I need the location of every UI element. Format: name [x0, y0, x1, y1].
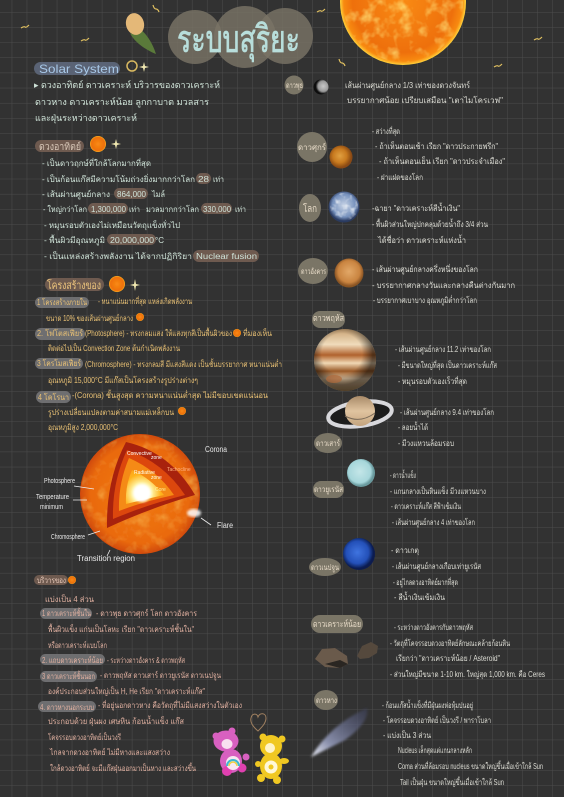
structure text: - หนาแน่นมากที่สุด แหล่งเกิดพลังงาน: [98, 295, 192, 306]
label: saturn: ดาวเสาร์: [316, 438, 341, 448]
sun fact lines: [42, 157, 257, 261]
icon: tulip: [123, 11, 156, 54]
panel: satellites: [34, 575, 242, 773]
sun fact lines: 1,300,000: [91, 205, 127, 214]
mercury text: บรรยากาศน้อย เปรียบเสมือน "เตาไมโครเวฟ": [347, 95, 503, 105]
planet: mercury: [314, 80, 328, 94]
icon: asteroid rocks: [315, 642, 378, 668]
neptune text: - อยู่ไกลดวงอาทิตย์มากที่สุด: [393, 576, 458, 588]
structure text: -(Corona) ชั้นสูงสุด ความหนาแน่นต่ำสุด ไม่มีขอบเขตแน่นอน: [72, 389, 268, 401]
earth text: ได้ชื่อว่า ดาวเคราะห์แห่งน้ำ: [377, 234, 466, 245]
confetti squiggles: [21, 5, 542, 67]
venus text: - ฝาแฝดของโลก: [377, 172, 423, 182]
satellites text: [40, 594, 242, 773]
diagram: sun cross-section: [80, 434, 201, 554]
asteroid text: - ระหว่างดาวอังคารกับดาวพฤหัส: [394, 623, 473, 632]
asteroid text: - วัตถุที่โคจรรอบดวงอาทิตย์ลักษณะคล้ายก้อนหิน: [390, 637, 510, 648]
mars text: - เส้นผ่านศูนย์กลางครึ่งหนึ่งของโลก: [372, 263, 478, 275]
label: neptune: [309, 558, 341, 576]
diagram inner labels: Core: [155, 487, 166, 493]
panel: saturn: [314, 396, 494, 453]
heading: Solar System: Solar System: [39, 62, 119, 76]
label: earth: [299, 194, 321, 222]
diagram inner labels: zone: [151, 455, 162, 461]
diagram callouts: Temperature: [36, 494, 69, 501]
diagram callouts: Photosphere: [44, 478, 75, 485]
intro text: และฝุ่นระหว่างดาวเคราะห์: [35, 112, 137, 124]
panel: asteroids: [311, 615, 545, 679]
sun fact lines: มวลมากกว่าโลก: [146, 204, 199, 214]
structure text: [37, 295, 282, 433]
earth text: [372, 202, 488, 245]
heading: satellites: บริวารของ: [37, 576, 66, 585]
comet text: [382, 699, 543, 787]
diagram callouts: [36, 445, 233, 563]
diagram callouts: minimum: [40, 504, 63, 511]
panel: sun facts: [35, 136, 259, 262]
structure text: 2. โฟโตสเฟียร์: [37, 328, 84, 338]
jupiter text: - มีขนาดใหญ่ที่สุด เป็นดาวเคราะห์แก๊ส: [398, 359, 497, 370]
icon: large sun: [340, 0, 466, 65]
structure text: อุณหภูมิสูง 2,000,000°C: [48, 423, 118, 433]
comet text: Tail เป็นฝุ่น ขนาดใหญ่ขึ้นเมื่อเข้าใกล้ Sun: [400, 776, 504, 787]
diagram inner labels: zone: [151, 475, 162, 481]
icon: heart: [251, 714, 266, 731]
panel: sun structure: [35, 276, 282, 433]
comet text: - ก้อนแก๊สน้ำแข็งที่มีฝุ่นผงห่อหุ้มปนอยู่: [382, 699, 473, 711]
planet: jupiter: [314, 329, 376, 391]
sun value pills: [88, 173, 259, 262]
label: asteroids: ดาวเคราะห์น้อย: [313, 618, 361, 629]
label: asteroids: [311, 615, 363, 633]
panel: mercury: [284, 76, 503, 105]
satellites text: 1 ดาวเคราะห์ชั้นใน: [42, 607, 91, 618]
satellites text: โคจรรอบดวงอาทิตย์เป็นวงรี: [48, 732, 122, 742]
diagram callouts: Flare: [217, 521, 233, 530]
satellites text: ไกลจากดวงอาทิตย์ ไม่มีหางและแสงสว่าง: [49, 747, 170, 757]
planet: neptune: [343, 538, 375, 570]
intro text: [34, 79, 220, 124]
icon: pink bear: [212, 728, 250, 776]
satellites text: 3 ดาวเคราะห์ชั้นนอก: [42, 670, 95, 681]
structure text: 3 โครโมสเฟียร์: [37, 358, 82, 368]
label: uranus: [313, 481, 344, 498]
mercury text: [345, 80, 503, 105]
label: mercury: [284, 76, 304, 94]
satellites text: พื้นผิวแข็ง แก่นเป็นโลหะ เรียก "ดาวเคราะห์ชั้นใน": [48, 623, 194, 634]
panel: jupiter: [312, 311, 497, 391]
neptune text: [391, 546, 481, 602]
sun fact lines: ไมล์: [151, 189, 165, 199]
label: mars: ดาวอังคาร: [301, 267, 326, 276]
label: jupiter: [312, 311, 345, 328]
satellites text: - ระหว่างดาวอังคาร & ดาวพฤหัส: [107, 656, 185, 665]
satellites text: หรือดาวเคราะห์แบบโลก: [48, 640, 107, 650]
uranus text: - ดาวเคราะห์แก๊ส สีฟ้าเข้มเงิน: [391, 501, 461, 511]
planet: earth: [328, 192, 360, 222]
saturn text: - เส้นผ่านศูนย์กลาง 9.4 เท่าของโลก: [400, 407, 494, 418]
satellites pills: [38, 608, 105, 712]
sun fact lines: - เป็นดาวฤกษ์ที่ใกล้โลกมากที่สุด: [42, 157, 151, 168]
sun fact lines: - ใหญ่กว่าโลก: [43, 204, 87, 214]
structure text: รูปร่างเปลี่ยนแปลงตามค่าสนามแม่เหล็กบน: [48, 406, 174, 418]
planet: mars: [334, 258, 364, 288]
earth text: - พื้นผิวส่วนใหญ่ปกคลุมด้วยน้ำถึง 3/4 ส่วน: [372, 218, 488, 229]
label: venus: [297, 132, 327, 162]
sun fact lines: เท่า: [213, 175, 224, 184]
uranus text: - เส้นผ่านศูนย์กลาง 4 เท่าของโลก: [392, 517, 475, 528]
mercury text: เส้นผ่านศูนย์กลาง 1/3 เท่าของดวงจันทร์: [345, 80, 471, 91]
structure pills: [35, 297, 89, 403]
label: earth: โลก: [303, 202, 317, 215]
planet: saturn: [327, 396, 393, 430]
comet text: - โคจรรอบดวงอาทิตย์ เป็นวงรี / พาราโบลา: [383, 715, 491, 725]
title: ระบบสุริยะ: [177, 19, 300, 62]
label: mercury: ดาวพุธ: [286, 81, 303, 90]
sun fact lines: 20,000,000: [110, 236, 155, 245]
panel: earth: [299, 192, 488, 245]
earth text: -ฉายา "ดาวเคราะห์สีน้ำเงิน": [372, 202, 460, 213]
saturn text: [398, 407, 494, 448]
label: uranus: ดาวยูเรนัส: [314, 485, 343, 495]
label: mars: [298, 258, 328, 284]
asteroid text: เรียกว่า "ดาวเคราะห์น้อย / Asteroid": [396, 653, 500, 663]
structure text: (Photosphere) - ทรงกลมแสง ให้แสงทุกสีเป็นพื้นผิวของ: [85, 327, 232, 338]
structure text: อุณหภูมิ 15,000°C มีแก๊สเป็นโครงสร้างรูปร่างต่างๆ: [48, 375, 198, 386]
planet: venus: [330, 146, 352, 168]
label: comet: [314, 690, 338, 710]
satellites text: องค์ประกอบส่วนใหญ่เป็น H, He เรียก "ดาวเคราะห์แก๊ส": [48, 686, 205, 696]
label: saturn: [314, 433, 342, 453]
structure text: 1 โครงสร้างภายใน: [37, 297, 87, 307]
label: jupiter: ดาวพฤหัส: [313, 313, 344, 323]
sun fact lines: 28: [198, 175, 210, 184]
diagram inner labels: [127, 451, 191, 493]
panel: venus: [297, 125, 505, 182]
saturn text: - ลอยน้ำได้: [398, 421, 428, 432]
sun fact lines: 864,000: [117, 190, 147, 199]
sun fact lines: เท่า: [129, 205, 140, 214]
icon: small sun: [109, 276, 140, 292]
structure text: (Chromosphere) - ทรงกลมสี มีแสงสีแดง เป็นชั้นบรรยากาศ หนาแน่นต่ำ: [85, 358, 282, 369]
label: comet: ดาวหาง: [316, 696, 337, 705]
panel: comet: [311, 690, 543, 787]
venus text: - สว่างที่สุด: [372, 125, 400, 136]
mars text: [372, 263, 515, 306]
sun fact lines: Nuclear fusion: [196, 252, 257, 261]
diagram inner labels: Convective: [127, 451, 152, 457]
icon: small sun: [90, 136, 121, 152]
sun fact lines: °C: [155, 236, 164, 245]
panel: uranus: [313, 459, 486, 528]
planet: uranus: [347, 459, 375, 487]
icon: comet: [311, 708, 367, 757]
uranus text: [390, 469, 486, 528]
mars text: - บรรยากาศกลางวันและกลางคืนต่างกันมาก: [372, 281, 515, 290]
sun fact lines: 330,000: [203, 205, 232, 214]
satellites text: ประกอบด้วย ฝุ่นผง เศษหิน ก้อนน้ำแข็ง แก๊ส: [48, 715, 184, 726]
satellites text: - ดาวพุธ ดาวศุกร์ โลก ดาวอังคาร: [96, 608, 198, 618]
heading: sun: ดวงอาทิตย์: [39, 141, 81, 153]
structure text: ติดต่อไปเป็น Convection Zone ต้นกำเนิดพลังงาน: [48, 343, 180, 353]
label: neptune: ดาวเนปจูน: [311, 563, 339, 573]
venus text: - ถ้าเห็นตอนเย็น เรียก "ดาวประจำเมือง": [379, 156, 505, 166]
icon: orbit sparkle: [127, 61, 149, 72]
sun fact lines: - เป็นก้อนแก๊สมีความโน้มถ่วงยิ่งมากกว่าโลก: [42, 173, 195, 184]
diagram callouts: Transition region: [77, 554, 135, 563]
satellites text: แบ่งเป็น 4 ส่วน: [45, 594, 94, 604]
title: [168, 6, 313, 68]
neptune text: - เส้นผ่านศูนย์กลางเกือบเท่ายูเรนัส: [392, 561, 481, 572]
saturn text: - มีวงแหวนล้อมรอบ: [398, 439, 454, 448]
heading: structure: โครงสร้างของ: [47, 278, 101, 292]
satellites text: - ที่อยู่นอกดาวหาง คือวัตถุที่ไม่มีแสงสว่างในตัวเอง: [98, 699, 242, 711]
sun fact lines: - พื้นผิวมีอุณหภูมิ: [44, 234, 105, 246]
diagram inner labels: Radiative: [134, 470, 155, 476]
label: venus: ดาวศุกร์: [298, 142, 327, 152]
structure text: 4 โคโรนา: [38, 392, 69, 402]
icons: inline suns: [136, 313, 241, 415]
structure text: ที่มองเห็น: [243, 327, 272, 338]
sun fact lines: - หมุนรอบตัวเองไม่เหมือนวัตถุแข็งทั่วไป: [44, 219, 180, 230]
satellites text: ใกล้ดวงอาทิตย์ จะมีแก๊สฝุ่นออกมาเป็นหาง และสว่างขึ้น: [50, 762, 196, 773]
panel: mars: [298, 258, 515, 306]
venus text: [372, 125, 505, 182]
uranus text: - ดาวน้ำแข็ง: [390, 469, 416, 480]
structure text: ขนาด 10% ของเส้นผ่านศูนย์กลาง: [46, 313, 133, 324]
sun fact lines: - เป็นแหล่งสร้างพลังงาน ได้จากปฏิกิริยา: [44, 251, 192, 261]
satellites text: 2. แถบดาวเคราะห์น้อย: [42, 655, 103, 665]
diagram callouts: Chromosphere: [51, 534, 85, 541]
satellites text: 4. ดาวหางนอกระบบ: [40, 703, 94, 712]
diagram callouts: Corona: [205, 445, 227, 454]
venus text: - ถ้าเห็นตอนเช้า เรียก "ดาวประกายพรึก": [375, 141, 498, 151]
mars text: - บรรยากาศเบาบาง อุณหภูมิต่ำกว่าโลก: [373, 294, 477, 306]
jupiter text: [395, 344, 497, 386]
uranus text: - แกนกลางเป็นหินแข็ง มีวงแหวนบาง: [390, 486, 486, 496]
satellites text: - ดาวพฤหัส ดาวเสาร์ ดาวยูเรนัส ดาวเนปจูน: [100, 670, 221, 681]
icon: yellow bear: [255, 734, 289, 784]
asteroid text: [390, 623, 545, 679]
jupiter text: - หมุนรอบตัวเองเร็วที่สุด: [398, 375, 467, 386]
diagram inner labels: Tachocline: [167, 467, 191, 473]
intro text: ▸ ดวงอาทิตย์ ดาวเคราะห์ บริวารของดาวเคราะห์: [34, 79, 220, 90]
jupiter text: - เส้นผ่านศูนย์กลาง 11.2 เท่าของโลก: [395, 344, 491, 355]
neptune text: - ดาวเกตุ: [391, 546, 419, 555]
panel: neptune: [309, 538, 481, 602]
comet text: - แบ่งเป็น 3 ส่วน: [383, 730, 431, 740]
sun fact lines: เท่า: [235, 205, 246, 214]
sun fact lines: - เส้นผ่านศูนย์กลาง: [42, 189, 110, 200]
neptune text: - สีน้ำเงินเข้มเงิน: [394, 591, 445, 602]
comet text: Nucleus เล็กสุดแต่แกนกลางหลัก: [398, 745, 472, 755]
intro text: ดาวหาง ดาวเคราะห์น้อย ลูกกาบาต มวลสาร: [35, 96, 209, 108]
